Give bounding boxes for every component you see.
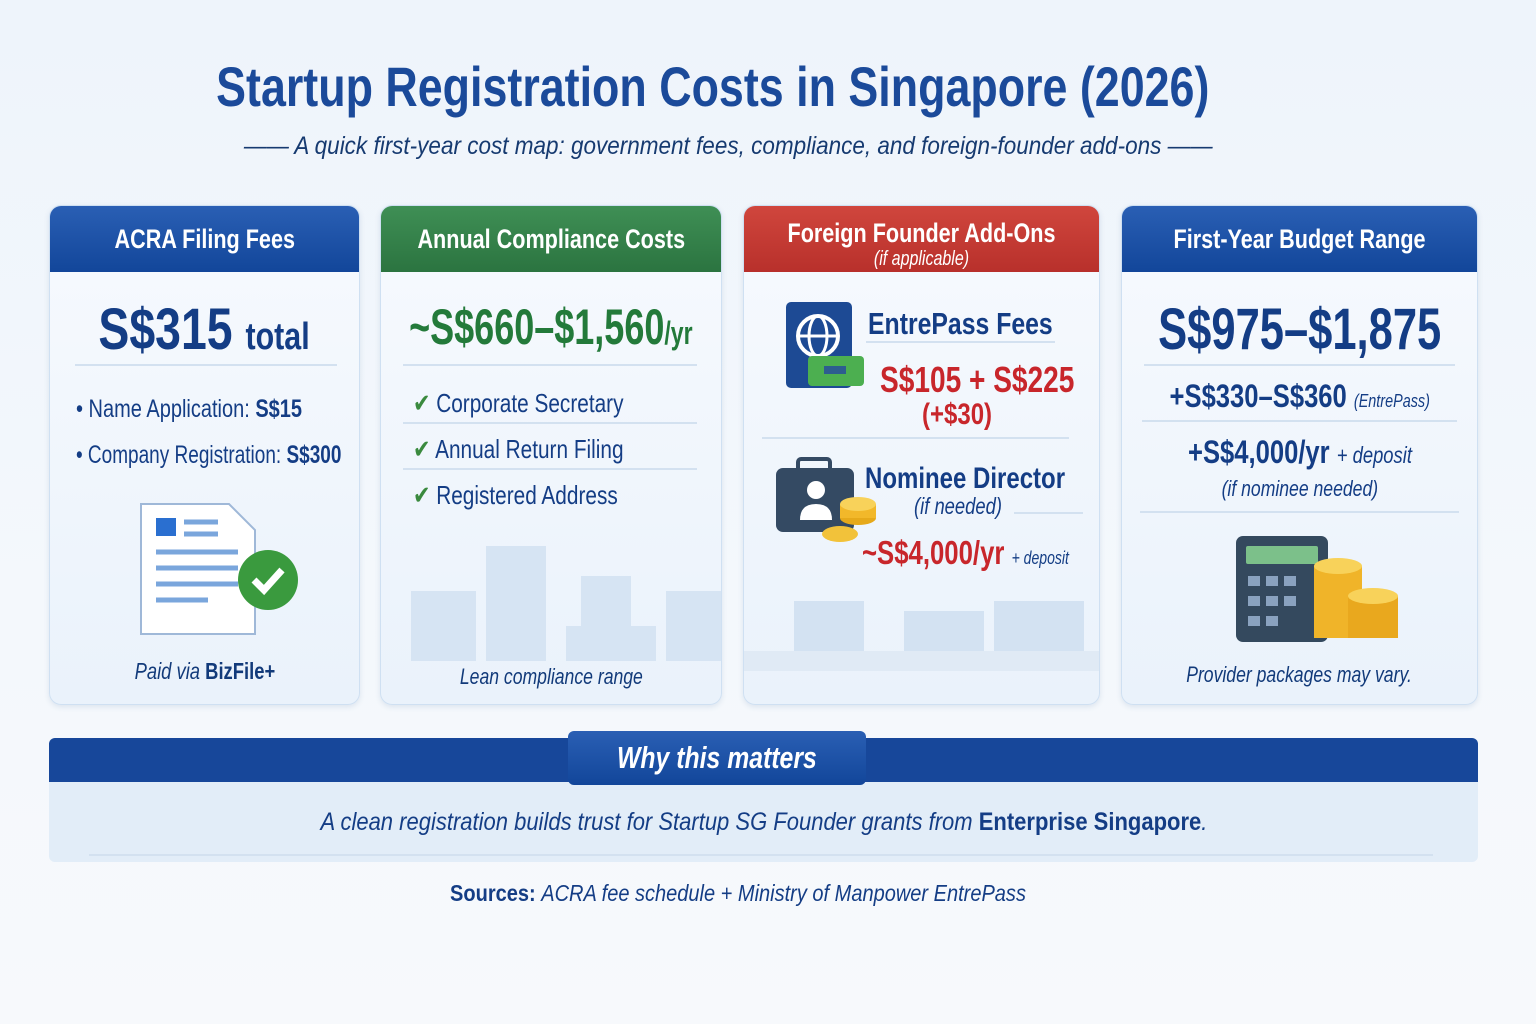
footer note: Provider packages may vary. xyxy=(1187,662,1412,687)
nominee cost: ~S$4,000/yr + deposit xyxy=(862,534,1069,571)
fee list xyxy=(76,395,341,469)
header: First-Year Budget Range xyxy=(1173,224,1426,254)
EntrePass add: +S$330–S$360 (EntrePass) xyxy=(1169,378,1430,414)
budget range: S$975–$1,875 xyxy=(1158,297,1441,362)
panel: foreign founder add-ons: (+$30) xyxy=(922,398,992,431)
panel: ACRA filing fees xyxy=(49,205,360,705)
header xyxy=(1122,206,1477,272)
checklist: ✔ Corporate Secretary xyxy=(413,388,624,418)
panel: foreign founder add-ons: (if needed) xyxy=(914,493,1002,519)
checklist xyxy=(413,388,624,510)
EntrePass amount: S$105 + S$225 xyxy=(880,359,1074,400)
city skyline illustration xyxy=(411,546,721,661)
header xyxy=(744,206,1099,272)
cost range: ~S$660–$1,560/yr xyxy=(409,299,693,355)
total: S$315 total xyxy=(99,297,310,362)
header xyxy=(50,206,359,272)
header: ACRA Filing Fees xyxy=(114,224,295,254)
footer note: Lean compliance range xyxy=(460,664,642,689)
nominee director: Nominee Director xyxy=(865,462,1065,495)
header: Annual Compliance Costs xyxy=(417,224,685,254)
heading tab xyxy=(568,731,866,785)
title: Startup Registration Costs in Singapore (2026) xyxy=(216,55,1210,118)
icon: briefcase with coins xyxy=(776,457,876,542)
panel: first-year budget xyxy=(1121,205,1478,705)
panel: annual compliance xyxy=(380,205,722,705)
header xyxy=(381,206,721,272)
panel: first-year budget: (if nominee needed) xyxy=(1221,476,1378,501)
sources: Sources: ACRA fee schedule + Ministry of Manpower EntrePass xyxy=(450,880,1026,906)
skyline illustration xyxy=(744,601,1099,671)
fee list: • Name Application: S$15 xyxy=(76,395,302,423)
statement: A clean registration builds trust for Startup SG Founder grants from Enterprise Singapore. xyxy=(320,808,1207,836)
panel: foreign founder add-ons xyxy=(743,205,1100,705)
checklist: ✔ Registered Address xyxy=(413,480,618,510)
checklist: ✔ Annual Return Filing xyxy=(413,434,624,464)
header: Foreign Founder Add-Ons xyxy=(788,218,1055,248)
icon: document with check xyxy=(140,503,298,635)
EntrePass fees: EntrePass Fees xyxy=(868,306,1053,341)
icon: calculator with coins xyxy=(1236,536,1398,642)
panel: why this matters xyxy=(49,738,1478,862)
footer note: Paid via BizFile+ xyxy=(134,658,275,684)
header: (if applicable) xyxy=(874,248,969,270)
subtitle: —— A quick first-year cost map: government fees, compliance, and foreign-founder add-ons —— xyxy=(244,132,1212,160)
fee list: • Company Registration: S$300 xyxy=(76,441,341,469)
nominee add: +S$4,000/yr + deposit xyxy=(1188,434,1411,470)
heading tab: Why this matters xyxy=(617,740,817,775)
icon: passport xyxy=(786,302,864,388)
